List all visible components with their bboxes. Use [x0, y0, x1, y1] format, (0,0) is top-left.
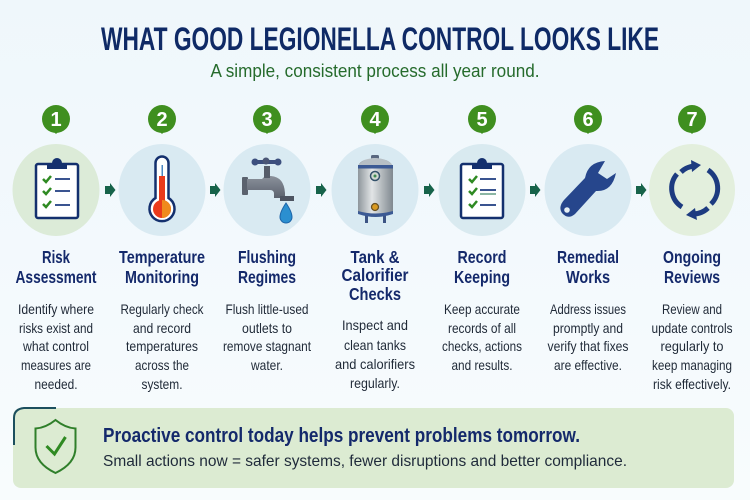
heading: Keeping	[454, 267, 510, 287]
subtitle: A simple, consistent process all year round.	[210, 61, 540, 81]
description	[18, 301, 94, 392]
description	[223, 301, 311, 373]
description	[335, 317, 415, 391]
description: remove stagnant	[223, 338, 311, 354]
step 1: risk assessment	[12, 105, 100, 392]
number badge 5: 5	[476, 109, 488, 131]
description: Regularly check	[120, 301, 204, 317]
description: Flush little-used	[226, 301, 308, 317]
heading: Risk	[42, 247, 70, 267]
arrow 2	[210, 183, 220, 197]
step 4: tank and calorifier checks	[332, 105, 418, 391]
description: temperatures	[126, 338, 198, 354]
description: Inspect and	[342, 317, 408, 333]
heading: Tank &	[350, 247, 400, 267]
arrow 1	[105, 183, 116, 197]
heading	[557, 247, 619, 287]
heading: Reviews	[664, 267, 720, 287]
heading: Remedial	[557, 247, 619, 267]
heading: Ongoing	[663, 247, 721, 267]
heading	[16, 247, 97, 287]
number badge 4: 4	[369, 109, 381, 131]
description: checks, actions	[442, 338, 522, 354]
arrow 5	[530, 183, 540, 197]
description: outlets to	[242, 320, 292, 336]
description	[120, 301, 204, 392]
callout banner	[13, 408, 734, 488]
arrow 6	[636, 183, 646, 197]
number badge 1: 1	[50, 109, 62, 131]
icon circle: clipboard checklist	[12, 144, 100, 236]
callout text: Small actions now = safer systems, fewer disruptions and better compliance.	[103, 453, 627, 470]
description: water.	[250, 357, 283, 373]
number badge 7	[678, 105, 706, 134]
description: Address issues	[550, 301, 626, 317]
description: needed.	[34, 376, 78, 392]
description: across the	[135, 357, 189, 373]
description: regularly to	[660, 338, 724, 354]
description: Keep accurate	[444, 301, 520, 317]
number badge 4	[361, 105, 389, 134]
arrow 3	[316, 183, 326, 197]
heading: Checks	[349, 284, 401, 304]
heading: Flushing	[238, 247, 296, 267]
icon circle: wrench	[544, 144, 632, 236]
icon circle: tap with drop	[224, 144, 310, 236]
number badge 3	[253, 105, 281, 134]
description: system.	[142, 376, 182, 392]
arrow 4	[424, 183, 434, 197]
description: and results.	[452, 357, 512, 373]
description: promptly and	[553, 320, 623, 336]
callout heading: Proactive control today helps prevent problems tomorrow.	[103, 425, 580, 447]
description	[652, 301, 732, 392]
description: risks exist and	[19, 320, 93, 336]
icon circle: clipboard records	[438, 144, 526, 236]
description: are effective.	[554, 357, 622, 373]
description: verify that fixes	[548, 338, 628, 354]
description	[548, 301, 628, 373]
heading: Works	[566, 267, 610, 287]
heading: Record	[458, 247, 506, 267]
heading: Temperature	[119, 247, 205, 267]
heading	[454, 247, 510, 287]
number badge 2: 2	[156, 109, 168, 131]
icon circle: water tank	[332, 144, 418, 236]
number badge 2	[148, 105, 176, 134]
heading: Assessment	[16, 267, 97, 287]
description: clean tanks	[344, 337, 406, 353]
number badge 7: 7	[686, 109, 698, 131]
step 2: temperature monitoring	[118, 105, 206, 392]
description: and record	[133, 320, 191, 336]
step 5: record keeping	[438, 105, 526, 373]
number badge 6: 6	[582, 109, 594, 131]
step 7: ongoing reviews	[649, 105, 735, 392]
description	[442, 301, 522, 373]
number badge 3: 3	[261, 109, 273, 131]
heading	[342, 247, 409, 304]
description: and calorifiers	[335, 356, 415, 372]
description: update controls	[652, 320, 732, 336]
number badge 6	[574, 105, 602, 134]
description: records of all	[448, 320, 516, 336]
heading: Monitoring	[125, 267, 199, 287]
icon circle: thermometer	[118, 144, 206, 236]
heading: Regimes	[238, 267, 296, 287]
description: what control	[22, 338, 89, 354]
heading	[663, 247, 721, 287]
description: Review and	[662, 301, 722, 317]
description: Identify where	[18, 301, 94, 317]
description: regularly.	[350, 375, 400, 391]
number badge 5	[468, 105, 496, 134]
icon: shield with check	[36, 420, 76, 473]
description: measures are	[21, 357, 91, 373]
heading	[119, 247, 205, 287]
description: risk effectively.	[653, 376, 731, 392]
step 3: flushing regimes	[223, 105, 311, 373]
number badge 1	[42, 105, 70, 134]
icon circle: review cycle arrows	[649, 144, 735, 236]
step 6: remedial works	[544, 105, 632, 373]
heading: Calorifier	[342, 265, 409, 285]
heading	[238, 247, 296, 287]
description: keep managing	[652, 357, 732, 373]
